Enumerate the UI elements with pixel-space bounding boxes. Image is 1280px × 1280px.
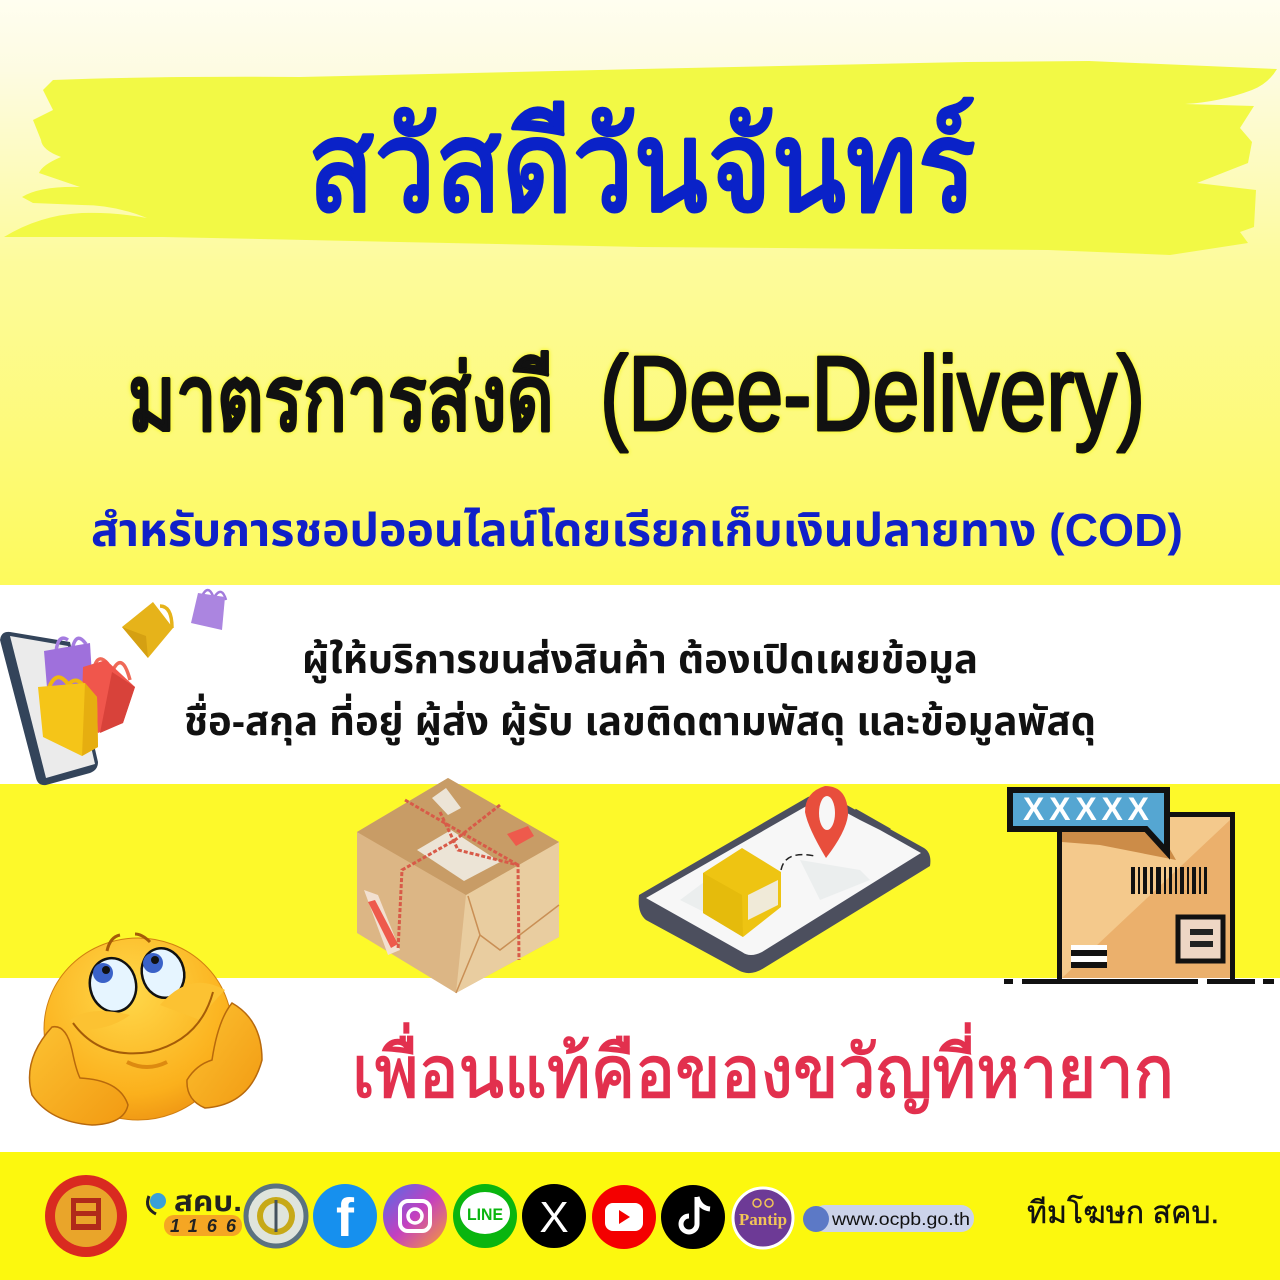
icon: line: LINE [467,1205,503,1224]
hand right [187,1003,262,1108]
subtitle: Dee-Delivery: มาตรการส่งดี [128,348,554,450]
logo: OCPB seal [45,1175,127,1257]
icon: phone with location pin [639,786,930,973]
top background panel [0,0,1280,585]
title: สวัสดีวันจันทร์ [308,96,976,239]
disclosure text: ผู้ให้บริการขนส่งสินค้า ต้องเปิดเผยข้อมูล [302,637,978,684]
hand left [30,1027,128,1125]
subtitle: Dee-Delivery: (Dee-Delivery) [600,335,1145,453]
icon: parcel box [357,778,559,993]
icon: youtube [592,1185,656,1249]
icon: ocpb mark [246,1186,306,1246]
icon: box with barcode and tag [1004,790,1274,984]
sub heading: COD: สำหรับการชอปออนไลน์โดยเรียกเก็บเงินปลายทาง (COD) [91,504,1183,556]
logo: hotline 1166: สคบ. [174,1186,242,1217]
white band: quote [0,978,1280,1152]
brush stroke banner [4,61,1277,255]
icon: tiktok [661,1185,725,1249]
subtitle: Dee-Delivery [128,335,1145,453]
website pill: www.ocpb.go.th [831,1209,970,1229]
icon: facebook: f [336,1188,355,1248]
logo: hotline 1166 [148,1186,242,1236]
logo: hotline 1166: 1166 [170,1216,237,1236]
icon: thinking emoji [30,934,262,1125]
icon: x: X [539,1193,569,1242]
quote text: เพื่อนแท้คือของขวัญที่หายาก [352,1023,1174,1113]
white band: disclosure [0,585,1280,784]
yellow band: parcels [0,784,1280,978]
footer band [0,1152,1280,1280]
label: XXXXX: XXXXX [1023,791,1150,827]
icon: instagram [383,1184,447,1248]
disclosure text [184,637,1096,746]
website pill [803,1205,974,1232]
disclosure text: ชื่อ-สกุล ที่อยู่ ผู้ส่ง ผู้รับ เลขติดตามพัสดุ และข้อมูลพัสดุ [184,693,1096,746]
team credit: ทีมโฆษก สคบ. [1027,1195,1219,1230]
icon: pantip: Pantip [739,1210,787,1229]
icon: line [453,1184,517,1248]
icon: pantip [733,1188,793,1248]
footer logos [45,1175,974,1257]
icon: facebook [313,1184,377,1248]
icon: x [522,1184,586,1248]
icon: phone with shopping bags [0,590,226,785]
